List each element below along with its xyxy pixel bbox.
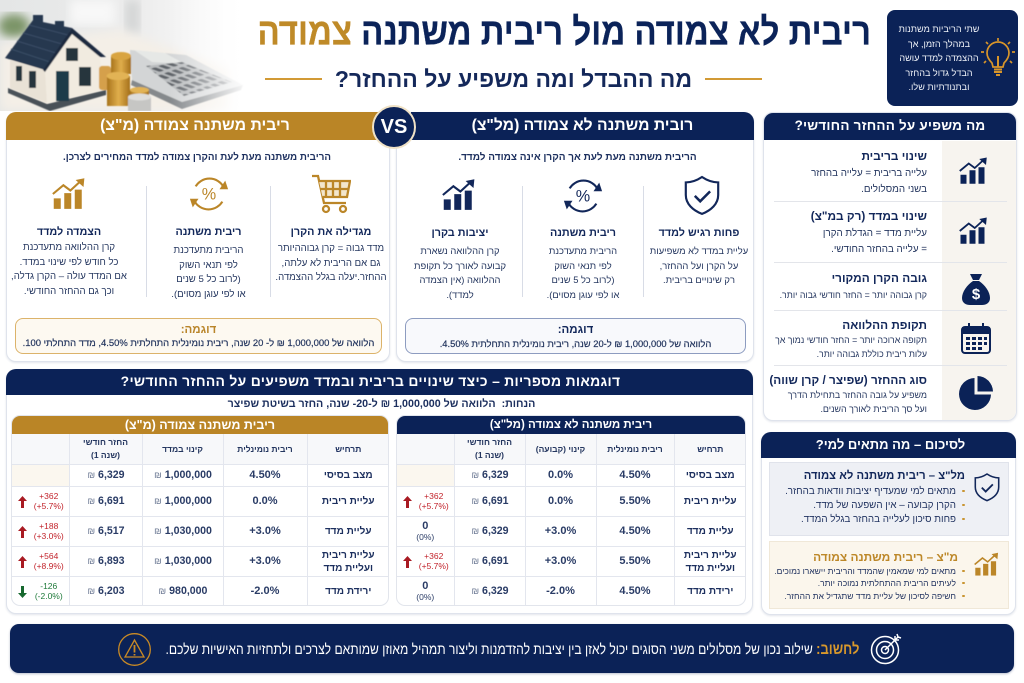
factor heading: סוג ההחזר (שפיצר / קרן שווה): [769, 373, 927, 387]
table: indexed: ריבית נומינלית: [237, 444, 293, 454]
column body: הריבית מתעדכנת: [174, 245, 243, 256]
column heading: ריבית משתנה: [550, 227, 616, 239]
icon: percent cycle: [190, 178, 228, 210]
icon: chart: [959, 218, 987, 244]
intro text: הריבית משתנה מעת לעת והקרן צמודה למדד המחירים לצרכן.: [63, 152, 331, 163]
footer banner: [10, 624, 1014, 673]
table: non-indexed: עליית מדד: [687, 526, 734, 537]
table: indexed: ירידת מדד: [325, 586, 371, 597]
panel header: דוגמאות מספריות – כיצד שינויים בריבית ובמדד משפיעים על ההחזר החודשי?: [121, 373, 620, 389]
column heading: הצמדה למדד: [37, 226, 101, 238]
example box: [15, 318, 382, 354]
table: non-indexed: תרחיש: [697, 444, 723, 454]
column body: (לרוב כל 5 שנים: [176, 274, 241, 285]
icon: warning: [118, 633, 151, 666]
column body: [11, 242, 127, 297]
title: ריבית לא צמודה מול ריבית משתנה צמודה: [257, 10, 871, 53]
column: less sensitive: [650, 176, 748, 285]
summary box: non-indexed: [769, 462, 1009, 536]
table: non-indexed: 6,329 ₪: [471, 469, 509, 481]
panel header: [6, 369, 753, 395]
factor: principal size: [780, 271, 990, 305]
icon: growth chart: [442, 179, 474, 210]
column body: או לפי עוגן מסוים).: [547, 289, 619, 300]
table: non-indexed: +3.0%: [545, 525, 576, 537]
column body: וכך גם ההחזר החודשי.: [24, 286, 114, 297]
table: non-indexed: 0.0%: [548, 469, 573, 481]
factor heading: שינוי בריבית: [861, 149, 927, 163]
panel header: לסיכום – מה מתאים למי?: [816, 437, 965, 452]
table: non-indexed: +362: [424, 490, 443, 500]
table: indexed: +362: [39, 490, 58, 500]
table: indexed: +188: [39, 520, 58, 530]
table: indexed: 1,000,000 ₪: [154, 495, 212, 507]
icon: growth chart: [52, 178, 84, 209]
table: indexed: קינוי במדד: [162, 444, 203, 454]
factor text: [823, 228, 927, 255]
table: non-indexed: מצב בסיסי: [686, 470, 735, 481]
column body: קבועה לאורך כל תקופת: [414, 260, 506, 271]
icon: shield: [684, 176, 720, 215]
callout text: במהלך הזמן, אך: [908, 39, 970, 49]
table: indexed: 0.0%: [252, 495, 278, 507]
panel header: מה משפיע על ההחזר החודשי?: [795, 118, 985, 133]
box heading: מל"צ – ריבית משתנה לא צמודה: [804, 470, 965, 482]
column body: [275, 243, 387, 283]
column: variable rate: [547, 180, 620, 300]
callout text: ההצמדה למדד עושה: [899, 53, 979, 63]
column body: [650, 245, 748, 285]
table: indexed: (+3.0%): [34, 530, 64, 540]
panel: numeric examples: [6, 369, 753, 614]
factor text: [811, 168, 927, 195]
table: non-indexed: 6,329 ₪: [471, 585, 509, 597]
factor: rate change: [811, 149, 987, 195]
panel: summary: [761, 432, 1016, 615]
column body: קרן ההלוואה נשארת: [420, 245, 500, 256]
column body: קרן ההלוואה מתעדכנת: [23, 242, 115, 253]
column body: [547, 245, 620, 300]
table: non-indexed: החזר חודשי: [467, 437, 512, 447]
panel header: [761, 432, 1016, 458]
table: indexed: ועליית מדד: [323, 562, 373, 574]
table title: [397, 416, 745, 434]
table: indexed: (-2.0%): [35, 590, 63, 600]
column: grows principal: [275, 174, 387, 283]
column body: למדד).: [446, 289, 474, 300]
factor text: עליית מדד = הגדלת הקרן: [823, 228, 927, 239]
table: non-indexed: 0: [422, 580, 428, 592]
factor text: קרן גבוהה יותר = החזר חודשי גבוה יותר.: [780, 290, 927, 300]
table: non-indexed: ירידת מדד: [687, 586, 733, 597]
table: non-indexed: 4.50%: [619, 525, 651, 537]
table: non-indexed: (שנה 1): [475, 450, 504, 460]
factor heading: גובה הקרן המקורי: [832, 271, 927, 285]
table: indexed: +3.0%: [249, 525, 281, 537]
column body: גם אם הריבית לא עלתה,: [282, 258, 380, 269]
panel: indexed variable rate: [6, 112, 390, 362]
table: indexed: החזר חודשי: [83, 437, 128, 447]
table title: ריבית משתנה צמודה (מ"צ): [125, 418, 275, 432]
table: non-indexed: 6,691 ₪: [471, 555, 509, 567]
factor text: עלות ריבית כוללת גבוהה יותר.: [817, 349, 927, 359]
table: non-indexed: 6,329 ₪: [471, 525, 509, 537]
column body: ההחזר.יעלה בגלל ההצמדה.: [275, 272, 387, 283]
factor text: משפיע על גובה ההחזר בתחילת הדרך: [788, 390, 927, 400]
table: indexed: עליית מדד: [325, 526, 372, 537]
panel: non-indexed variable rate: [396, 112, 754, 362]
table: non-indexed: -2.0%: [546, 585, 575, 597]
column body: על הקרן ועל ההחזר,: [660, 260, 738, 271]
factor: amortization type: [769, 373, 993, 414]
table: indexed: (+5.7%): [34, 500, 64, 510]
example heading: דוגמה:: [558, 324, 593, 336]
table: non-indexed: עליית ריבית: [684, 496, 737, 507]
panel header: indexed: ריבית משתנה צמודה (מ"צ): [100, 117, 290, 134]
table: indexed: +3.0%: [249, 555, 281, 567]
table: non-indexed: ריבית נומינלית: [607, 444, 663, 454]
table: indexed: מצב בסיסי: [324, 470, 373, 481]
panel: what affects the monthly payment: [763, 112, 1017, 421]
panel header: non-indexed: [411, 112, 754, 140]
table: non-indexed: קינוי (קבועה): [536, 444, 585, 454]
table: indexed: [11, 415, 389, 606]
table: indexed: עליית ריבית: [322, 550, 375, 560]
example heading: דוגמה:: [181, 324, 216, 336]
table: non-indexed: 5.50%: [619, 495, 651, 507]
callout: key insight: [887, 10, 1018, 106]
table: non-indexed: (0%): [416, 532, 434, 542]
subtitle: מה ההבדל ומה משפיע על ההחזר?: [335, 66, 692, 92]
factor: index change: [811, 209, 987, 255]
factor text: תקופה ארוכה יותר = החזר חודשי נמוך אך: [775, 335, 927, 345]
panel header: [763, 112, 1017, 140]
column body: (לרוב כל 5 שנים: [552, 274, 614, 285]
example box: [405, 318, 746, 354]
icon: money bag: [962, 274, 990, 305]
icon: calendar: [961, 323, 991, 354]
column body: אם המדד עולה – הקרן גדלה,: [11, 271, 127, 282]
table title: [12, 416, 388, 434]
table: indexed: 6,203 ₪: [87, 585, 125, 597]
icon: percent cycle: [564, 180, 602, 212]
callout text: הבדל גדול בהחזר: [905, 68, 973, 78]
column heading: פחות רגיש למדד: [659, 227, 739, 239]
icon: light bulb: [981, 38, 1015, 76]
factor heading: שינוי במדד (רק במ"צ): [811, 209, 927, 223]
table: non-indexed: [396, 415, 746, 606]
intro text: הריבית משתנה מעת לעת אך הקרן אינה צמודה למדד.: [458, 152, 697, 163]
factor text: עלייה בריבית = עלייה בהחזר: [811, 168, 927, 179]
list item: פחות סיכון לעלייה בהחזר בגלל המדד.: [801, 514, 956, 525]
table: indexed: תרחיש: [335, 444, 361, 454]
VS badge: [372, 105, 416, 149]
column body: או לפי עוגן מסוים).: [171, 289, 246, 300]
panel header: non-indexed: רובית משתנה לא צמודה (מל"צ): [472, 117, 693, 134]
column body: כל חודש לפי שינוי במדד.: [20, 257, 118, 268]
table: indexed: 6,691 ₪: [87, 495, 125, 507]
icon: money bag: $: [972, 286, 981, 303]
table: indexed: 6,517 ₪: [87, 525, 125, 537]
column body: לפי תנאי השוק: [554, 260, 612, 271]
table: indexed: +564: [39, 550, 58, 560]
list item: חשיפה לסיכון של עליית מדד שתגדיל את ההחזר.: [784, 591, 956, 601]
factor text: [775, 335, 927, 359]
column body: [414, 245, 506, 300]
callout text: [898, 24, 979, 92]
table: indexed: -126: [40, 580, 57, 590]
footer text: לחשוב: שילוב נכון של מסלולים משני הסוגים יכול לאזן בין יציבות להזדמנות וליצור תמהיל מאוזן שמותאם לצרכים ולתחזיות האישיות שלכם.: [166, 639, 859, 657]
column heading: ריבית משתנה: [175, 226, 242, 238]
panel header: indexed: [6, 112, 384, 140]
table: non-indexed: (0%): [416, 592, 434, 602]
column heading: יציבות בקרן: [431, 227, 489, 239]
column body: ההלוואה (אין הצמדה: [420, 274, 500, 285]
table: non-indexed: 5.50%: [619, 555, 651, 567]
table: indexed: עליית ריבית: [322, 496, 375, 507]
callout text: שתי הריביות משתנות: [899, 24, 979, 34]
table: non-indexed: (+5.7%): [419, 500, 449, 510]
column body: הריבית מתעדכנת: [549, 245, 617, 256]
icon: chart: [959, 158, 987, 184]
list item: הקרן קבועה – אין השפעה של מדד.: [813, 500, 956, 511]
summary box: indexed: [769, 541, 1009, 609]
table: non-indexed: 4.50%: [619, 585, 651, 597]
column: indexation: [11, 178, 127, 297]
column: variable rate: [171, 178, 246, 300]
table: non-indexed: עליית ריבית: [684, 550, 737, 560]
icon: shield: [974, 473, 1000, 502]
column body: [171, 245, 246, 300]
list item: מתאים למי שמעדיף יציבות וודאות בהחזר.: [785, 486, 956, 497]
example text: הלוואה של 1,000,000 ₪ ל-20 שנה, ריבית נומינלית התחלתית 4.50%.: [440, 338, 711, 349]
icon: chart: [974, 552, 998, 576]
table: non-indexed: (+5.7%): [419, 560, 449, 570]
VS badge: VS: [381, 116, 407, 138]
table: indexed: -2.0%: [251, 585, 279, 597]
column body: לפי תנאי השוק: [179, 260, 238, 271]
column body: מדד גבוה = קרן גבוההיותר: [278, 243, 384, 254]
icon column background: [942, 141, 1018, 422]
table: indexed: 6,329 ₪: [87, 469, 125, 481]
table: non-indexed: 0.0%: [548, 495, 573, 507]
table: non-indexed: ועליית מדד: [685, 562, 735, 574]
box heading: מ"צ – ריבית משתנה צמודה: [813, 550, 958, 564]
table: non-indexed: +3.0%: [545, 555, 576, 567]
table: indexed: 980,000 ₪: [159, 585, 207, 597]
hero image: house, coins and calculator: [0, 0, 242, 111]
table: indexed: 1,030,000 ₪: [154, 555, 212, 567]
icon: pie chart: [959, 376, 993, 410]
column heading: מגדילה את הקרן: [291, 226, 371, 238]
icon: target: [870, 634, 902, 664]
callout text: ובתנודתיות שלו.: [909, 82, 969, 92]
icon: shopping cart: [312, 174, 351, 214]
factor text: בשני המסלולים.: [861, 184, 927, 195]
table: non-indexed: 0: [422, 520, 428, 532]
column: principal stability: [414, 179, 506, 300]
column body: רק שינויים בריבית.: [663, 274, 735, 285]
table title: ריבית משתנה לא צמודה (מל"צ): [490, 419, 652, 431]
factor: loan term: [775, 318, 991, 359]
table: non-indexed: 6,691 ₪: [471, 495, 509, 507]
factor heading: תקופת ההלוואה: [842, 318, 927, 332]
table: non-indexed: +362: [424, 550, 443, 560]
list item: לעיתים הריבית ההתחלתית נמוכה יותר.: [818, 578, 956, 588]
table: indexed: (+8.9%): [34, 560, 64, 570]
example text: הלוואה של 1,000,000 ₪ ל- 20 שנה, ריבית נומינלית התחלתית 4.50%, מדד התחלתי 100.: [23, 338, 374, 349]
table: indexed: 6,893 ₪: [87, 555, 125, 567]
factor text: ועל סך הריבית לאורך השנים.: [820, 404, 927, 414]
column body: עליית במדד לא משפיעות: [650, 245, 748, 256]
table: indexed: 1,030,000 ₪: [154, 525, 212, 537]
table: indexed: 1,000,000 ₪: [154, 469, 212, 481]
factor text: [788, 390, 927, 414]
table: non-indexed: 4.50%: [619, 469, 651, 481]
factor text: = עלייה בהחזר החודשי.: [831, 244, 927, 255]
table: indexed: 4.50%: [249, 469, 281, 481]
assumptions line: הנחות: הלוואה של 1,000,000 ₪ ל-20- שנה, החזר בשיטת שפיצר: [228, 398, 535, 410]
table: indexed: (שנה 1): [91, 450, 120, 460]
list item: מתאים למי שמאמין שהמדד והריבית יישארו נמוכים.: [774, 566, 956, 576]
